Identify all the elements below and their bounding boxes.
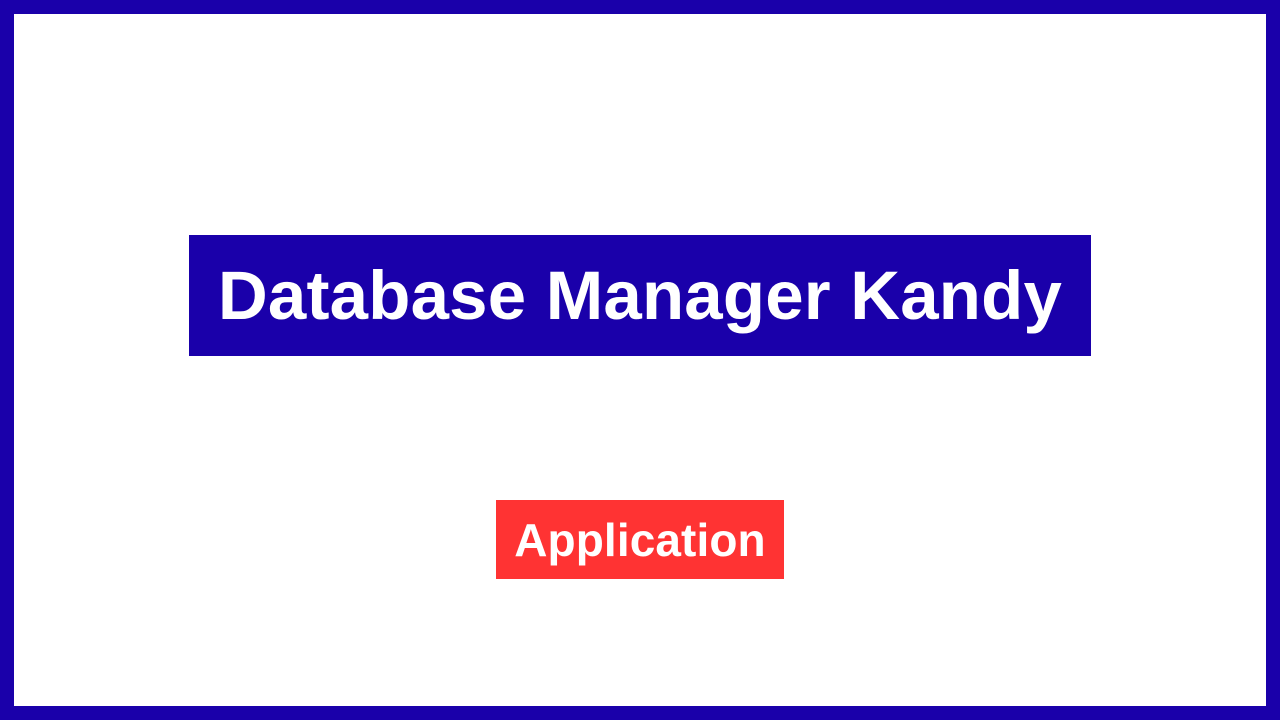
application label: Application [514,514,766,566]
title banner [189,235,1091,356]
title banner: Database Manager Kandy [218,257,1062,334]
application label [496,500,784,579]
